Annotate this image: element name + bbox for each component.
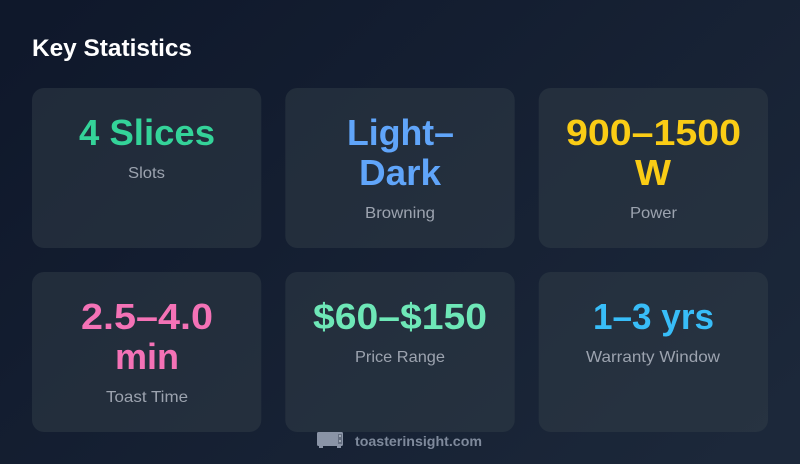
stat value: minutes: min bbox=[115, 336, 179, 377]
panel: warranty window bbox=[539, 272, 768, 432]
title: Key Statistics bbox=[32, 35, 192, 62]
stat value: warranty: 1–3 yrs bbox=[593, 296, 714, 337]
stat label: toast time: Toast Time bbox=[106, 389, 188, 406]
panel: toast time bbox=[32, 272, 261, 432]
panel: slots bbox=[32, 88, 261, 248]
stat label: price range: Price Range bbox=[355, 349, 445, 366]
stat label: warranty window: Warranty Window bbox=[586, 349, 720, 366]
footer brand bbox=[317, 432, 482, 449]
panel: browning bbox=[285, 88, 515, 248]
stat value: wattage: 900–1500 bbox=[566, 112, 741, 153]
panel: power bbox=[539, 88, 768, 248]
stat label: browning: Browning bbox=[365, 205, 435, 222]
stat value: light-dark: Dark bbox=[359, 152, 442, 193]
stat label: power: Power bbox=[630, 205, 678, 222]
panel: price range bbox=[285, 272, 515, 432]
stat label: slots: Slots bbox=[128, 165, 165, 182]
stat value: minutes: 2.5–4.0 bbox=[81, 296, 213, 337]
icon: toaster bbox=[317, 432, 343, 448]
footer text: toasterinsight.com bbox=[355, 433, 482, 449]
stat value: 4 slices: 4 Slices bbox=[79, 112, 215, 153]
stat value: price: $60–$150 bbox=[313, 296, 487, 337]
stat value: light-dark: Light– bbox=[347, 112, 454, 153]
stat value: wattage: W bbox=[635, 152, 671, 193]
